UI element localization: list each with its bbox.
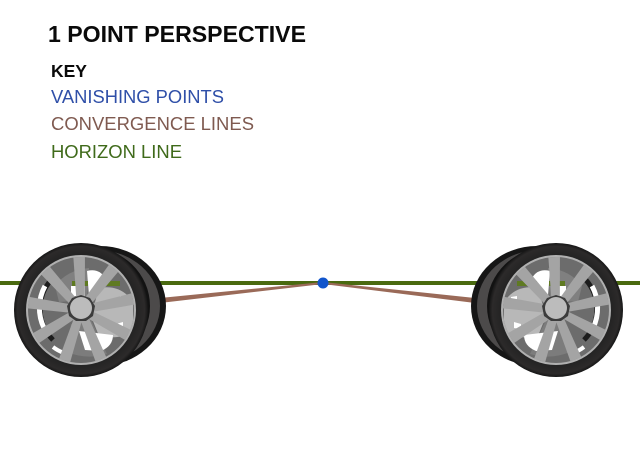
title: 1 POINT PERSPECTIVE: [48, 21, 306, 47]
horizon line: [0, 281, 640, 285]
legend item: vanishing points: VANISHING POINTS: [51, 87, 224, 107]
legend heading: KEY: [51, 61, 87, 81]
convergence lines: [160, 282, 475, 303]
legend item: convergence lines: CONVERGENCE LINES: [51, 114, 254, 134]
left wheel: [14, 243, 166, 377]
legend: key: [51, 61, 254, 162]
right wheel: [471, 243, 623, 377]
legend item: horizon line: HORIZON LINE: [51, 142, 182, 162]
vanishing point: [318, 278, 328, 288]
